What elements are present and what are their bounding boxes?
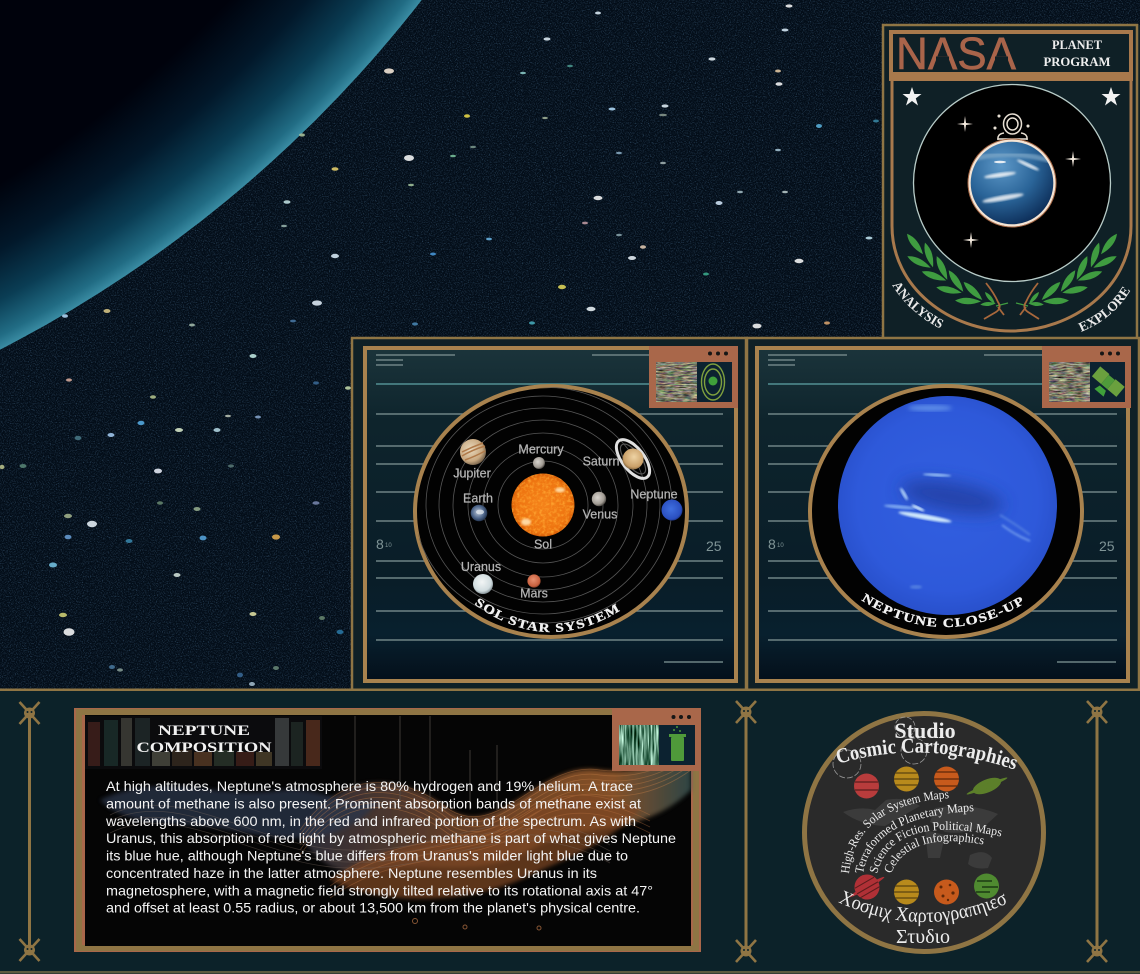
- icon: flask: [669, 726, 686, 761]
- NASA banner: PLANET: [1052, 38, 1103, 52]
- panel: Neptune composition: [74, 708, 701, 952]
- panel: studio seal: [802, 711, 1046, 954]
- black circle: [914, 84, 1110, 282]
- wave artwork: [100, 716, 691, 930]
- bright and dim stars: [0, 4, 879, 686]
- white corner stars: [902, 87, 1120, 106]
- composition text: Uranus, this absorption of red light by atmospheric methane is part of what gives Neptune: [106, 830, 676, 846]
- readouts: 8: [376, 536, 384, 552]
- NASA banner: [889, 28, 1133, 81]
- title: NEPTUNE: [158, 723, 250, 739]
- sparkles: [957, 116, 1081, 248]
- icon: orbit: [702, 364, 724, 400]
- planet labels: Earth: [463, 492, 493, 506]
- composition text: its blue hue, although Neptune's blue differs from Uranus's milder light blue due to: [106, 848, 628, 864]
- planet labels: Uranus: [461, 560, 501, 574]
- services list: Science Fiction Political Maps: [870, 821, 1002, 873]
- solar system disc: [415, 386, 687, 637]
- composition text: magnetosphere, with a magnetic field strongly tilted relative to its rotational axis at 47°: [106, 882, 653, 898]
- panel: mission badge: [882, 24, 1140, 337]
- planet labels: Saturn: [583, 454, 619, 468]
- Greek arc text: Χοσμιχ Χαρτογραπηιεσ: [838, 890, 1006, 926]
- scan lines: [768, 355, 1117, 662]
- readouts: 10: [777, 543, 784, 549]
- header tile: book spines: [85, 716, 322, 769]
- composition text: concentrated haze in the latter atmosphere. Neptune resembles Uranus in its: [106, 865, 597, 881]
- services list: Terraformed Planetary Maps: [854, 804, 974, 872]
- icon: satellite: [1087, 366, 1125, 403]
- curved caption: NEPTUNE CLOSE-UP: [861, 593, 1022, 628]
- Greek studio text: Στυδιο: [896, 926, 950, 948]
- ornament bars: [20, 701, 1107, 962]
- planets: [460, 434, 682, 594]
- readouts: 25: [706, 538, 722, 554]
- composition text: [105, 778, 676, 916]
- ANALYSIS label: ANALYSIS: [892, 283, 944, 328]
- Neptune disc: [810, 386, 1082, 637]
- composition text: amount of methane is also present. Prominent absorption bands of methane exist at: [106, 795, 641, 811]
- shield outline: [892, 80, 1131, 331]
- Cosmic Cartographies: Cosmic Cartographies: [836, 738, 1017, 769]
- services list: Celestial Infographics: [884, 833, 984, 872]
- ornate capital flourishes: [833, 717, 927, 778]
- NASA banner: PROGRAM: [1044, 54, 1110, 69]
- footer band: [0, 688, 1140, 974]
- Neptune planet: [838, 396, 1057, 615]
- readouts: [768, 536, 1115, 554]
- scan lines: [376, 355, 723, 662]
- NASA banner: NASA: [896, 28, 1016, 79]
- composition text: At high altitudes, Neptune's atmosphere is 80% hydrogen and 19% helium. A trace: [106, 778, 633, 794]
- planet labels: Mars: [520, 586, 548, 600]
- bottom planet row: [843, 866, 999, 908]
- composition text: and offset at least 0.55 radius, or about 13,500 km from the planet's physical centre.: [106, 900, 640, 916]
- corner tab: [649, 346, 738, 408]
- curved caption: SOL STAR SYSTEM: [474, 598, 620, 632]
- astronaut helmet: [994, 114, 1029, 140]
- panel: Neptune close-up: [746, 336, 1140, 688]
- services list: High-Res. Solar System Maps: [840, 792, 949, 874]
- top planet row: [854, 766, 1010, 800]
- planet labels: [453, 442, 678, 600]
- planet labels: Jupiter: [453, 466, 491, 480]
- readouts: 25: [1099, 538, 1115, 554]
- planet labels: Neptune: [630, 488, 678, 502]
- planet labels: Mercury: [518, 442, 564, 456]
- the Sun: [512, 474, 574, 536]
- planet limb: Neptune horizon: [0, 0, 689, 490]
- services list: [840, 792, 1002, 874]
- header tile: book spines: COMPOSITION: [136, 740, 272, 756]
- planet labels: Venus: [583, 508, 617, 522]
- orbit rings: [414, 387, 672, 623]
- badge planet: [968, 139, 1056, 227]
- panel: Sol star system: [350, 336, 748, 688]
- studio heading: Studio: [894, 718, 956, 743]
- readouts: 10: [385, 543, 392, 549]
- readouts: [376, 536, 722, 554]
- composition text: wavelengths above 600 nm, in the red and infrared portion of the spectrum. As with: [105, 813, 636, 829]
- corner tab: [612, 708, 701, 771]
- corner tab: [1042, 346, 1131, 408]
- planet labels: Sol: [534, 538, 552, 552]
- laurel wreath: [904, 232, 1120, 319]
- EXPLORE label: EXPLORE: [1078, 286, 1130, 332]
- faint world map: [843, 799, 998, 868]
- readouts: 8: [768, 536, 776, 552]
